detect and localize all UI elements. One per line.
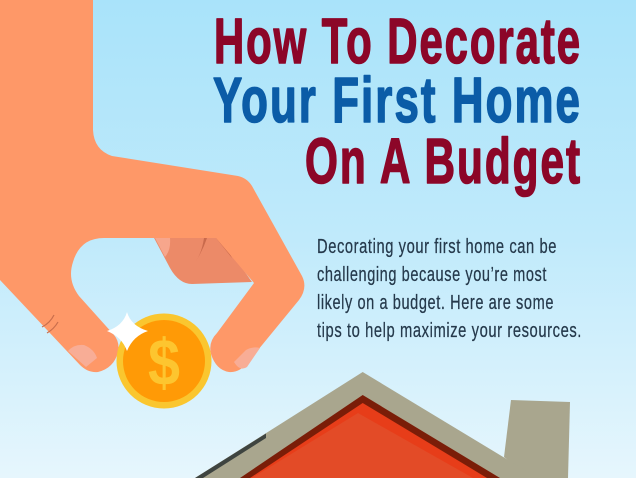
paragraph line 3: likely on a budget. Here are some — [317, 292, 554, 314]
knuckle wrinkles — [42, 315, 58, 333]
intro paragraph — [317, 236, 582, 342]
paragraph line 1: Decorating your first home can be — [317, 236, 557, 258]
nail: thumb — [234, 347, 260, 369]
hand body with thumb and index finger — [0, 0, 304, 372]
icon: gold dollar coin — [116, 314, 212, 408]
chimney — [504, 400, 570, 478]
dollar sign: $ — [148, 325, 180, 399]
roof outer frame — [195, 372, 538, 478]
paragraph line 2: challenging because you’re most — [317, 264, 547, 286]
dark roof edge — [195, 434, 266, 478]
title — [213, 5, 582, 197]
nail: index finger — [68, 345, 97, 367]
middle finger in shadow — [153, 234, 252, 284]
house roof — [195, 372, 538, 478]
roof inner shadow — [240, 395, 500, 478]
icon: hand pinching coin — [0, 0, 304, 372]
middle fingernail — [155, 238, 170, 257]
icon: sparkle — [107, 312, 148, 351]
red wall lighter face — [252, 413, 473, 478]
red wall — [250, 403, 487, 478]
